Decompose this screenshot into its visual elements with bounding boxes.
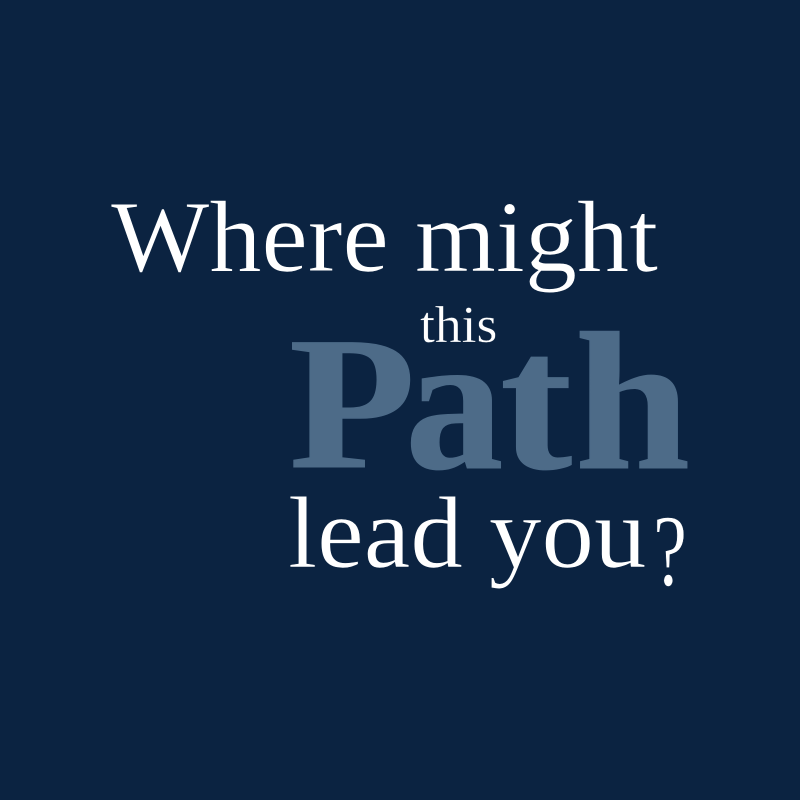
heading: Where might: Where might: [111, 180, 658, 294]
heading: Path: t: [500, 292, 572, 511]
text: this: this: [420, 296, 497, 354]
heading: Path: P: [289, 299, 416, 509]
heading: Path: a: [405, 292, 504, 511]
heading: Path: h: [575, 292, 690, 511]
heading: lead you: lead you: [288, 476, 646, 590]
heading: Path: [289, 292, 690, 511]
question mark: ?: [653, 494, 687, 608]
